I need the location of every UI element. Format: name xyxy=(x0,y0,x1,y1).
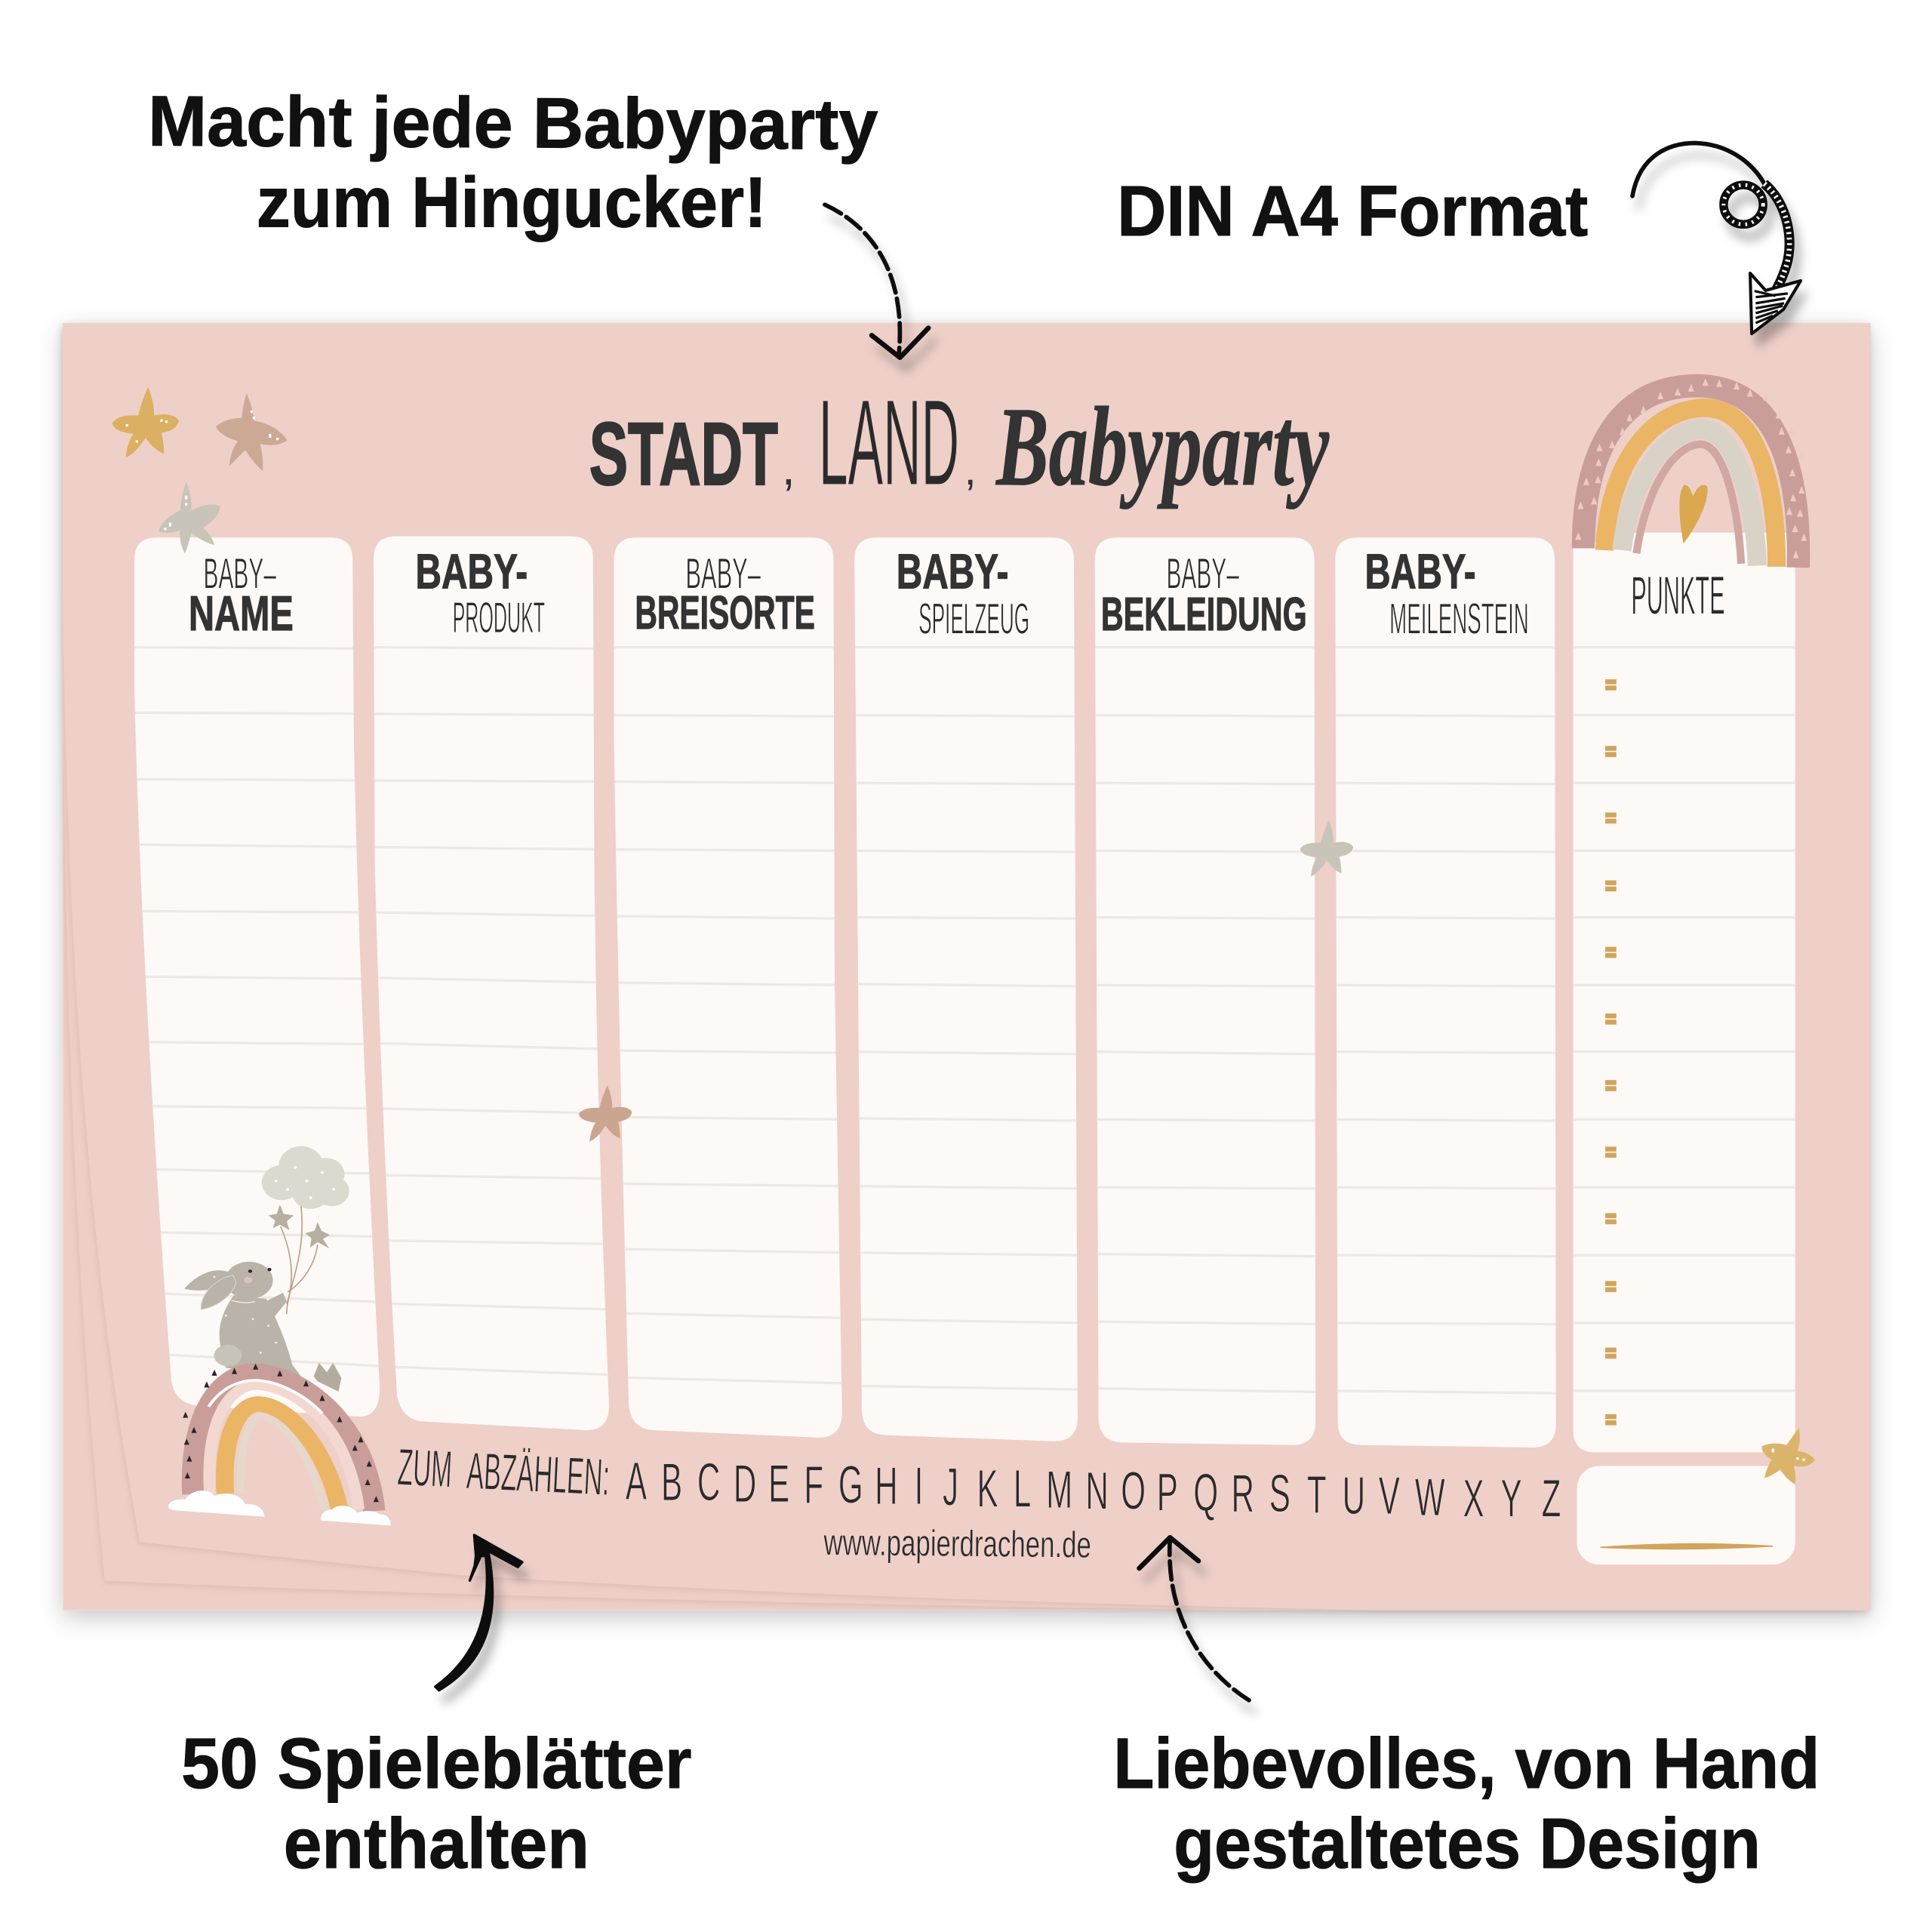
loop xyxy=(1724,185,1763,224)
callout: Macht jede Babyparty xyxy=(148,82,878,243)
heading xyxy=(1101,549,1307,641)
arrow: hand drawn to corner xyxy=(1632,143,1801,334)
bottom sheet xyxy=(63,323,1870,1611)
alphabet label xyxy=(396,1438,611,1506)
arrow: dashed bottom right xyxy=(1140,1537,1249,1700)
callout: DIN A4 Format: DIN A4 Format xyxy=(1117,171,1588,251)
icon: brown star mid xyxy=(579,1085,632,1141)
arrow: hand drawn bottom left xyxy=(435,1535,522,1690)
grey band xyxy=(1622,429,1758,565)
panel: column Baby-Produkt: PRODUKT xyxy=(453,594,545,642)
callout: Macht jede Babyparty: zum Hingucker! xyxy=(257,163,767,243)
title: Babyparty xyxy=(995,383,1330,509)
middle sheet curled corner xyxy=(63,323,1870,1611)
callout: Liebevolles von Hand: gestaltetes Design xyxy=(1174,1804,1761,1884)
callout: 50 Spieleblätter: enthalten xyxy=(284,1804,589,1884)
heading: BABY– xyxy=(685,549,761,598)
callout: 50 Spieleblätter: 50 Spieleblätter xyxy=(181,1724,692,1804)
title xyxy=(589,375,1330,511)
clouds xyxy=(168,1491,391,1525)
heading: BABY- xyxy=(1365,543,1476,598)
icon: brown star xyxy=(216,393,288,471)
score marks xyxy=(1605,679,1617,1426)
heading xyxy=(416,543,545,642)
heading: BABY- xyxy=(897,543,1008,598)
cloud xyxy=(262,1146,349,1209)
icon: grey star xyxy=(159,482,220,554)
panel: column Baby-Bekleidung xyxy=(1091,537,1319,1445)
heading: BABY- xyxy=(416,543,528,598)
icon: gold star xyxy=(112,387,179,457)
panel: column Punkte: PUNKTE xyxy=(1631,566,1725,626)
score line xyxy=(1601,1544,1773,1549)
heading: BABY– xyxy=(1166,549,1239,598)
alphabet letters: ABCDEFGHIJKLMNOPQRSTUVWXYZ xyxy=(626,1453,1561,1528)
panel: column Punkte xyxy=(1566,533,1800,1452)
title: , xyxy=(782,440,795,495)
heading xyxy=(897,543,1029,644)
head xyxy=(1750,273,1801,334)
panel: column Baby-Produkt xyxy=(370,537,611,1430)
top sheet curled corner xyxy=(63,323,1870,1611)
title: STADT xyxy=(589,405,778,503)
triangles xyxy=(1575,378,1807,558)
crown xyxy=(314,1363,341,1392)
outer band xyxy=(1583,386,1798,568)
shaft xyxy=(1764,183,1789,300)
alphabet label: ABZÄHLEN: xyxy=(466,1441,611,1506)
heading: NAME xyxy=(189,586,294,641)
title: LAND xyxy=(819,375,959,511)
illustration: rainbow top right xyxy=(1575,378,1807,568)
panel: column Baby-Name xyxy=(123,537,382,1417)
panel: column Baby-Breisorte xyxy=(611,537,846,1438)
icon: heart xyxy=(1679,485,1708,543)
callout: Liebevolles von Hand xyxy=(1113,1724,1820,1884)
beige band xyxy=(241,1416,324,1509)
orange band xyxy=(1604,408,1777,567)
callout: Liebevolles von Hand: Liebevolles, von Hand xyxy=(1113,1724,1820,1804)
strings xyxy=(281,1206,318,1314)
heading: BABY– xyxy=(204,549,276,598)
black triangles xyxy=(183,1364,379,1502)
title: , xyxy=(964,445,977,494)
alphabet label: ZUM xyxy=(396,1438,454,1498)
illustration: bunny on rainbow xyxy=(168,1146,391,1525)
pale band xyxy=(209,1385,358,1509)
arrow: dashed to title xyxy=(825,205,928,358)
icon: grey star mid xyxy=(1300,820,1353,876)
icon: gold star bottom right xyxy=(1761,1428,1815,1484)
heading: BREISORTE xyxy=(635,587,815,639)
callout: Macht jede Babyparty: Macht jede Babyparty xyxy=(148,82,878,165)
heading: BEKLEIDUNG xyxy=(1101,589,1307,641)
thin pink band xyxy=(1636,445,1741,564)
sheet stack xyxy=(63,323,1870,1611)
panel: column Baby-Spielzeug: SPIELZEUG xyxy=(918,595,1029,644)
bunny xyxy=(184,1262,301,1377)
website url: www.papierdrachen.de xyxy=(823,1522,1091,1566)
heading xyxy=(1365,543,1529,644)
panel: column Baby-Spielzeug xyxy=(851,537,1080,1441)
panel: total score box xyxy=(1577,1466,1795,1564)
orange band xyxy=(225,1404,340,1509)
callout: 50 Spieleblätter xyxy=(181,1724,692,1884)
white stripe xyxy=(208,1380,322,1414)
outer band xyxy=(193,1373,374,1511)
balloon stars xyxy=(269,1204,330,1248)
heading xyxy=(189,549,294,641)
panel: column Baby-Meilenstein: MEILENSTEIN xyxy=(1389,595,1529,644)
heading xyxy=(635,549,815,639)
panel: column Baby-Meilenstein xyxy=(1331,537,1560,1447)
